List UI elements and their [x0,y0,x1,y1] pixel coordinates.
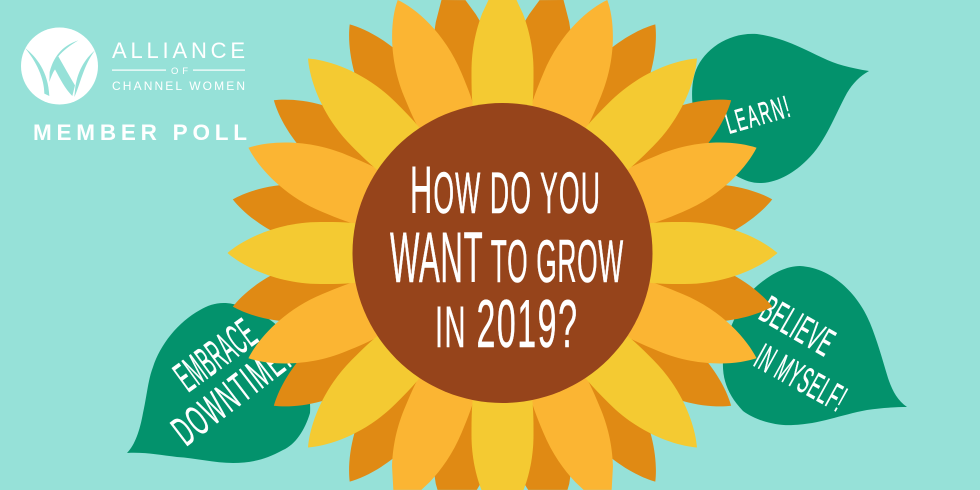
title: WANT TO GROW [390,217,623,298]
logo wordmark: ALLIANCE [112,38,245,63]
flower centre disc [352,103,652,403]
leaf label: Downtime!: DOWNTIME! [164,336,299,455]
gold petals [237,0,768,490]
leaf label: Learn!: LEARN! [722,91,794,141]
heading: member poll: MEMBER POLL [33,120,247,145]
title: IN 2019? [435,286,577,362]
logo: Alliance of Channel Women [21,28,245,104]
sunflower [227,0,778,490]
leaf: learn [692,34,869,183]
leaf label: in Myself!: IN MYSELF! [748,337,853,420]
leaf: embrace downtime [127,303,310,463]
title: HOW DO YOU [410,154,600,228]
leaf: believe in myself [723,266,907,425]
leaf label: Embrace: EMBRACE [165,309,265,400]
logo wordmark [112,38,245,93]
back petals [227,0,778,490]
yellow petals [228,0,778,490]
logo wordmark: OF [171,66,188,77]
title [390,154,623,362]
logo wordmark: CHANNEL WOMEN [112,79,245,93]
icon: logo circle with W [21,28,98,104]
leaf label: Believe: BELIEVE [752,289,841,365]
